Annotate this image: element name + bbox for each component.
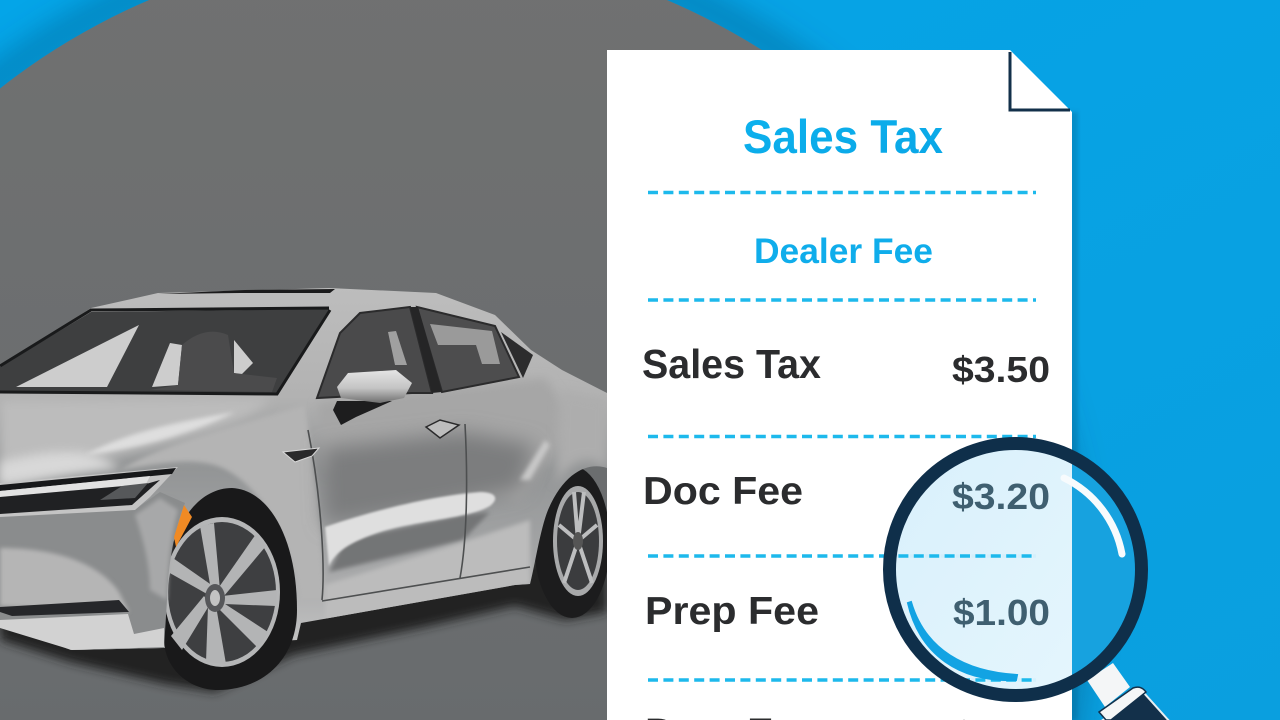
rear side window [417,307,519,392]
rear quarter glint [520,440,550,480]
subheading: Dealer Fee: Dealer Fee [754,232,933,271]
front bumper [0,492,185,650]
front wheel rim [164,517,280,667]
lower lip [0,614,164,650]
pillar [410,307,442,393]
door upper tone [381,380,555,494]
shadow behind receipt [1066,112,1078,720]
quarter window [501,332,533,378]
lower grille [0,600,129,616]
fender [124,411,322,584]
handle grip [1100,692,1170,720]
spokes [168,523,277,664]
bumper light panel [0,548,129,612]
illustration: silver car [0,288,610,692]
door dark band [322,432,535,525]
headlight [0,467,178,517]
dashed line in lens [883,554,1036,558]
bumper upper shine [135,498,178,600]
car floor shadow [0,560,607,692]
front side window [317,307,432,398]
door highlight streak [325,492,495,566]
hub [205,584,225,612]
row: Sales Tax [642,341,1050,390]
handle collar [1099,687,1146,720]
windshield frame [0,308,330,394]
divider 2 [648,298,1036,302]
hood highlight [0,400,259,483]
icon: magnifying glass [880,435,1170,720]
row label: Prep Fee: Prep Fee [645,590,819,633]
divider 1 [648,191,1036,194]
lens ring [890,444,1142,696]
seats and dashboard [150,332,277,392]
car body shell [0,288,607,650]
door cut lines [308,424,530,601]
lens glare: white arc [1064,478,1122,554]
door handle [426,420,459,438]
fender badge [283,448,319,462]
bumper shade [137,505,142,508]
handle stem [1087,663,1130,707]
heading: Sales Tax: Sales Tax [743,110,943,163]
windshield reflections [16,325,253,387]
front wheel arch and tire [164,488,297,690]
lens glare: blue arc [908,602,1017,680]
value: $3.50: $3.50 [952,349,1050,390]
magnified value: $3.20: $3.20 [952,476,1050,517]
divider 4 [648,554,1036,558]
divider 3 [648,435,1036,438]
rear quarter tone [554,425,607,478]
divider 5 [648,678,1036,682]
lower lip [66,648,134,650]
rear window reflection [430,324,500,364]
icon: folded corner [1010,52,1070,110]
front side window reflection [388,331,407,365]
roof glass strip [158,289,335,294]
lens tint [880,435,1152,705]
rear wheel [534,466,610,618]
door lower panel [325,520,530,625]
magnified value: $1.00: $1.00 [953,592,1050,633]
windshield [0,309,329,393]
orange side marker [174,505,192,547]
body shading [0,378,607,650]
door lower dark band [329,512,490,572]
panel: receipt paper [607,50,1072,720]
side mirror [333,370,412,425]
row: Sales Tax: Sales Tax [642,341,821,387]
row label: Doc Fee: Doc Fee [643,470,803,513]
